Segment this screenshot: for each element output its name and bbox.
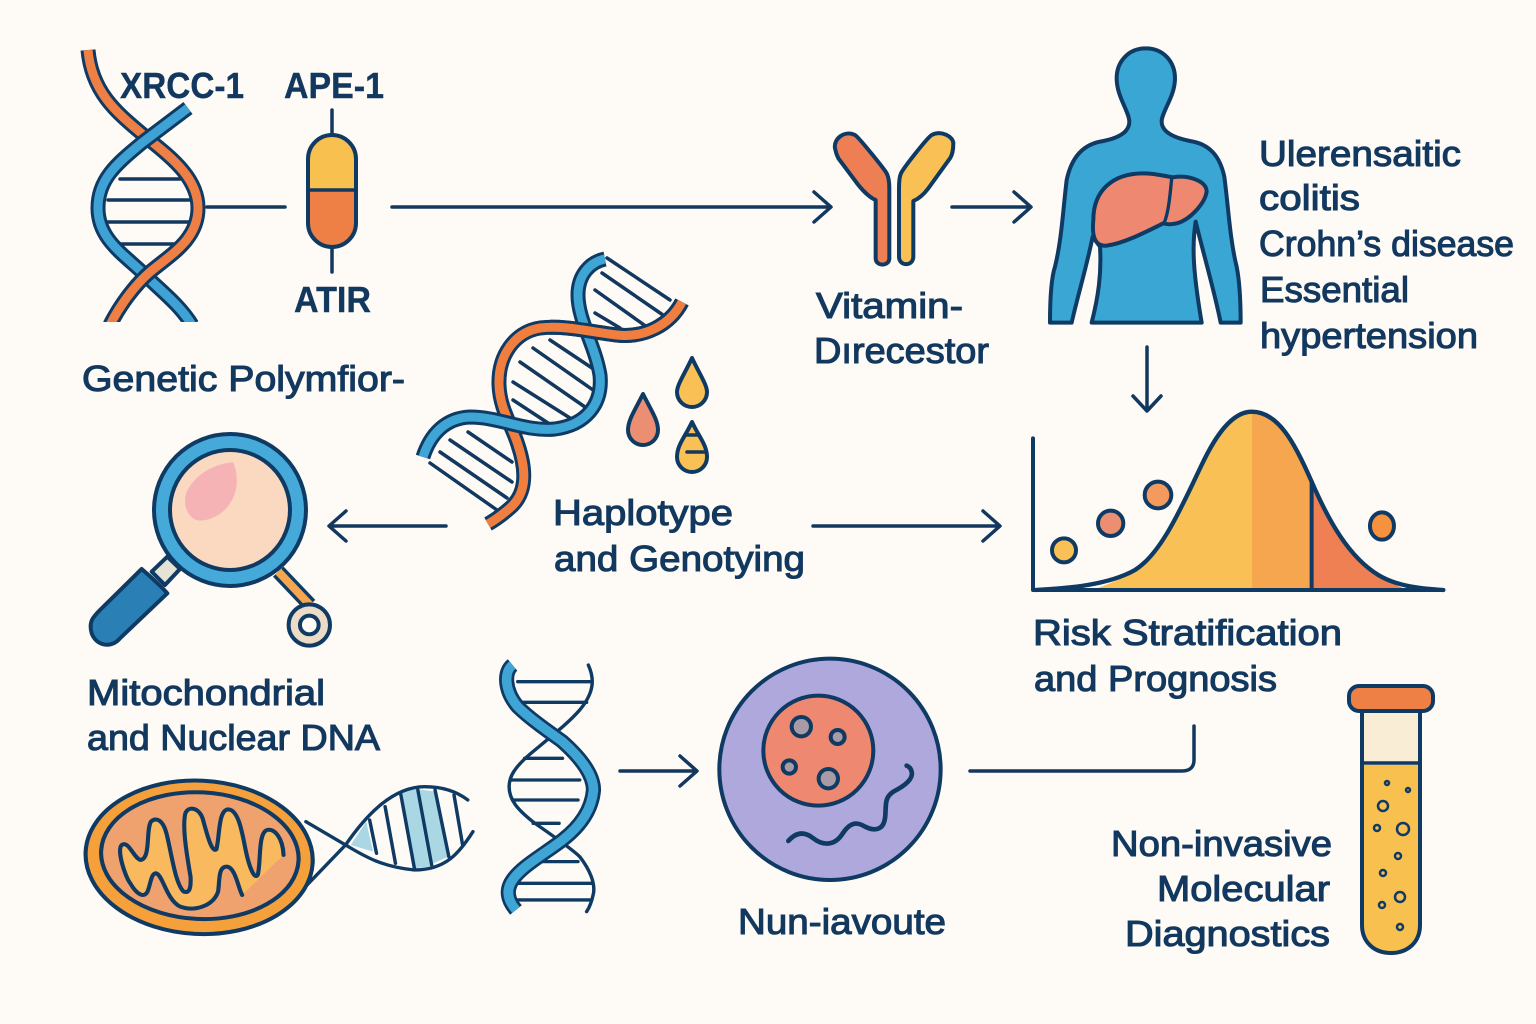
label: Vitamin-Direcestor: Dırecestor xyxy=(814,330,989,371)
list: diseases: Essential xyxy=(1260,269,1409,310)
list: diseases: colitis xyxy=(1259,177,1360,218)
arrow: capsule to receptor xyxy=(392,192,831,222)
label: Haplotype and Genotyping: and Genotying xyxy=(554,538,805,579)
icon: mitochondrion with DNA tail xyxy=(82,775,473,940)
label: Nun-iavoute: Nun-iavoute xyxy=(738,901,946,942)
label: Non-invasive Molecular Diagnostics xyxy=(1111,823,1332,954)
label: XRCC-1: XRCC-1 xyxy=(120,65,244,106)
icon: lower DNA helix xyxy=(507,665,594,912)
icon: drops xyxy=(628,358,707,472)
heading: Genetic Polymorphism: Genetic Polymfior- xyxy=(82,358,405,399)
label: Mitochondrial and Nuclear DNA: and Nuclear DNA xyxy=(87,717,380,758)
arrow: DNA to cell xyxy=(620,756,697,786)
arrow: body to risk chart xyxy=(1133,347,1161,411)
icon: Y receptor xyxy=(835,133,953,265)
icon: human body with liver xyxy=(1050,48,1241,323)
label: APE-1: APE-1 xyxy=(284,65,384,106)
icon: test tube xyxy=(1349,686,1433,953)
list: diseases: Crohn’s disease xyxy=(1259,223,1514,264)
icon: central DNA with drops xyxy=(423,258,707,524)
chart: risk distribution curve xyxy=(1033,412,1443,590)
label: Haplotype and Genotyping xyxy=(553,492,805,579)
label: Mitochondrial and Nuclear DNA xyxy=(87,672,380,758)
label: Risk Stratification and Prognosis xyxy=(1033,612,1342,699)
icon: liver xyxy=(1093,173,1207,246)
icon: capsule xyxy=(308,110,356,272)
arrow: receptor to body xyxy=(952,192,1031,222)
label: ATIR: ATIR xyxy=(294,279,371,320)
icon: top-left DNA helix xyxy=(88,50,198,325)
label: Non-invasive Molecular Diagnostics: Diagnostics xyxy=(1125,913,1330,954)
label: Risk Stratification and Prognosis: Risk Stratification xyxy=(1033,612,1342,653)
label: Non-invasive Molecular Diagnostics: Molecular xyxy=(1157,868,1330,909)
list: diseases: hypertension xyxy=(1260,315,1478,356)
connector: cell to risk xyxy=(970,726,1194,771)
icon: magnifying glass xyxy=(91,434,330,646)
label: Non-invasive Molecular Diagnostics: Non-invasive xyxy=(1111,823,1332,864)
connector: DNA to capsule xyxy=(207,205,285,209)
list: diseases: Ulerensaitic xyxy=(1259,133,1461,174)
label: Risk Stratification and Prognosis: and Prognosis xyxy=(1034,658,1277,699)
arrow: haplotype to risk chart xyxy=(813,511,1000,541)
label: Vitamin-Direcestor xyxy=(814,285,989,371)
arrow: haplotype to magnifier xyxy=(329,511,446,541)
label: Mitochondrial and Nuclear DNA: Mitochondrial xyxy=(87,672,325,713)
icon: cell xyxy=(719,659,941,880)
label: Vitamin-Direcestor: Vitamin- xyxy=(816,285,963,326)
list: diseases xyxy=(1259,133,1514,356)
label: Haplotype and Genotyping: Haplotype xyxy=(553,492,733,533)
